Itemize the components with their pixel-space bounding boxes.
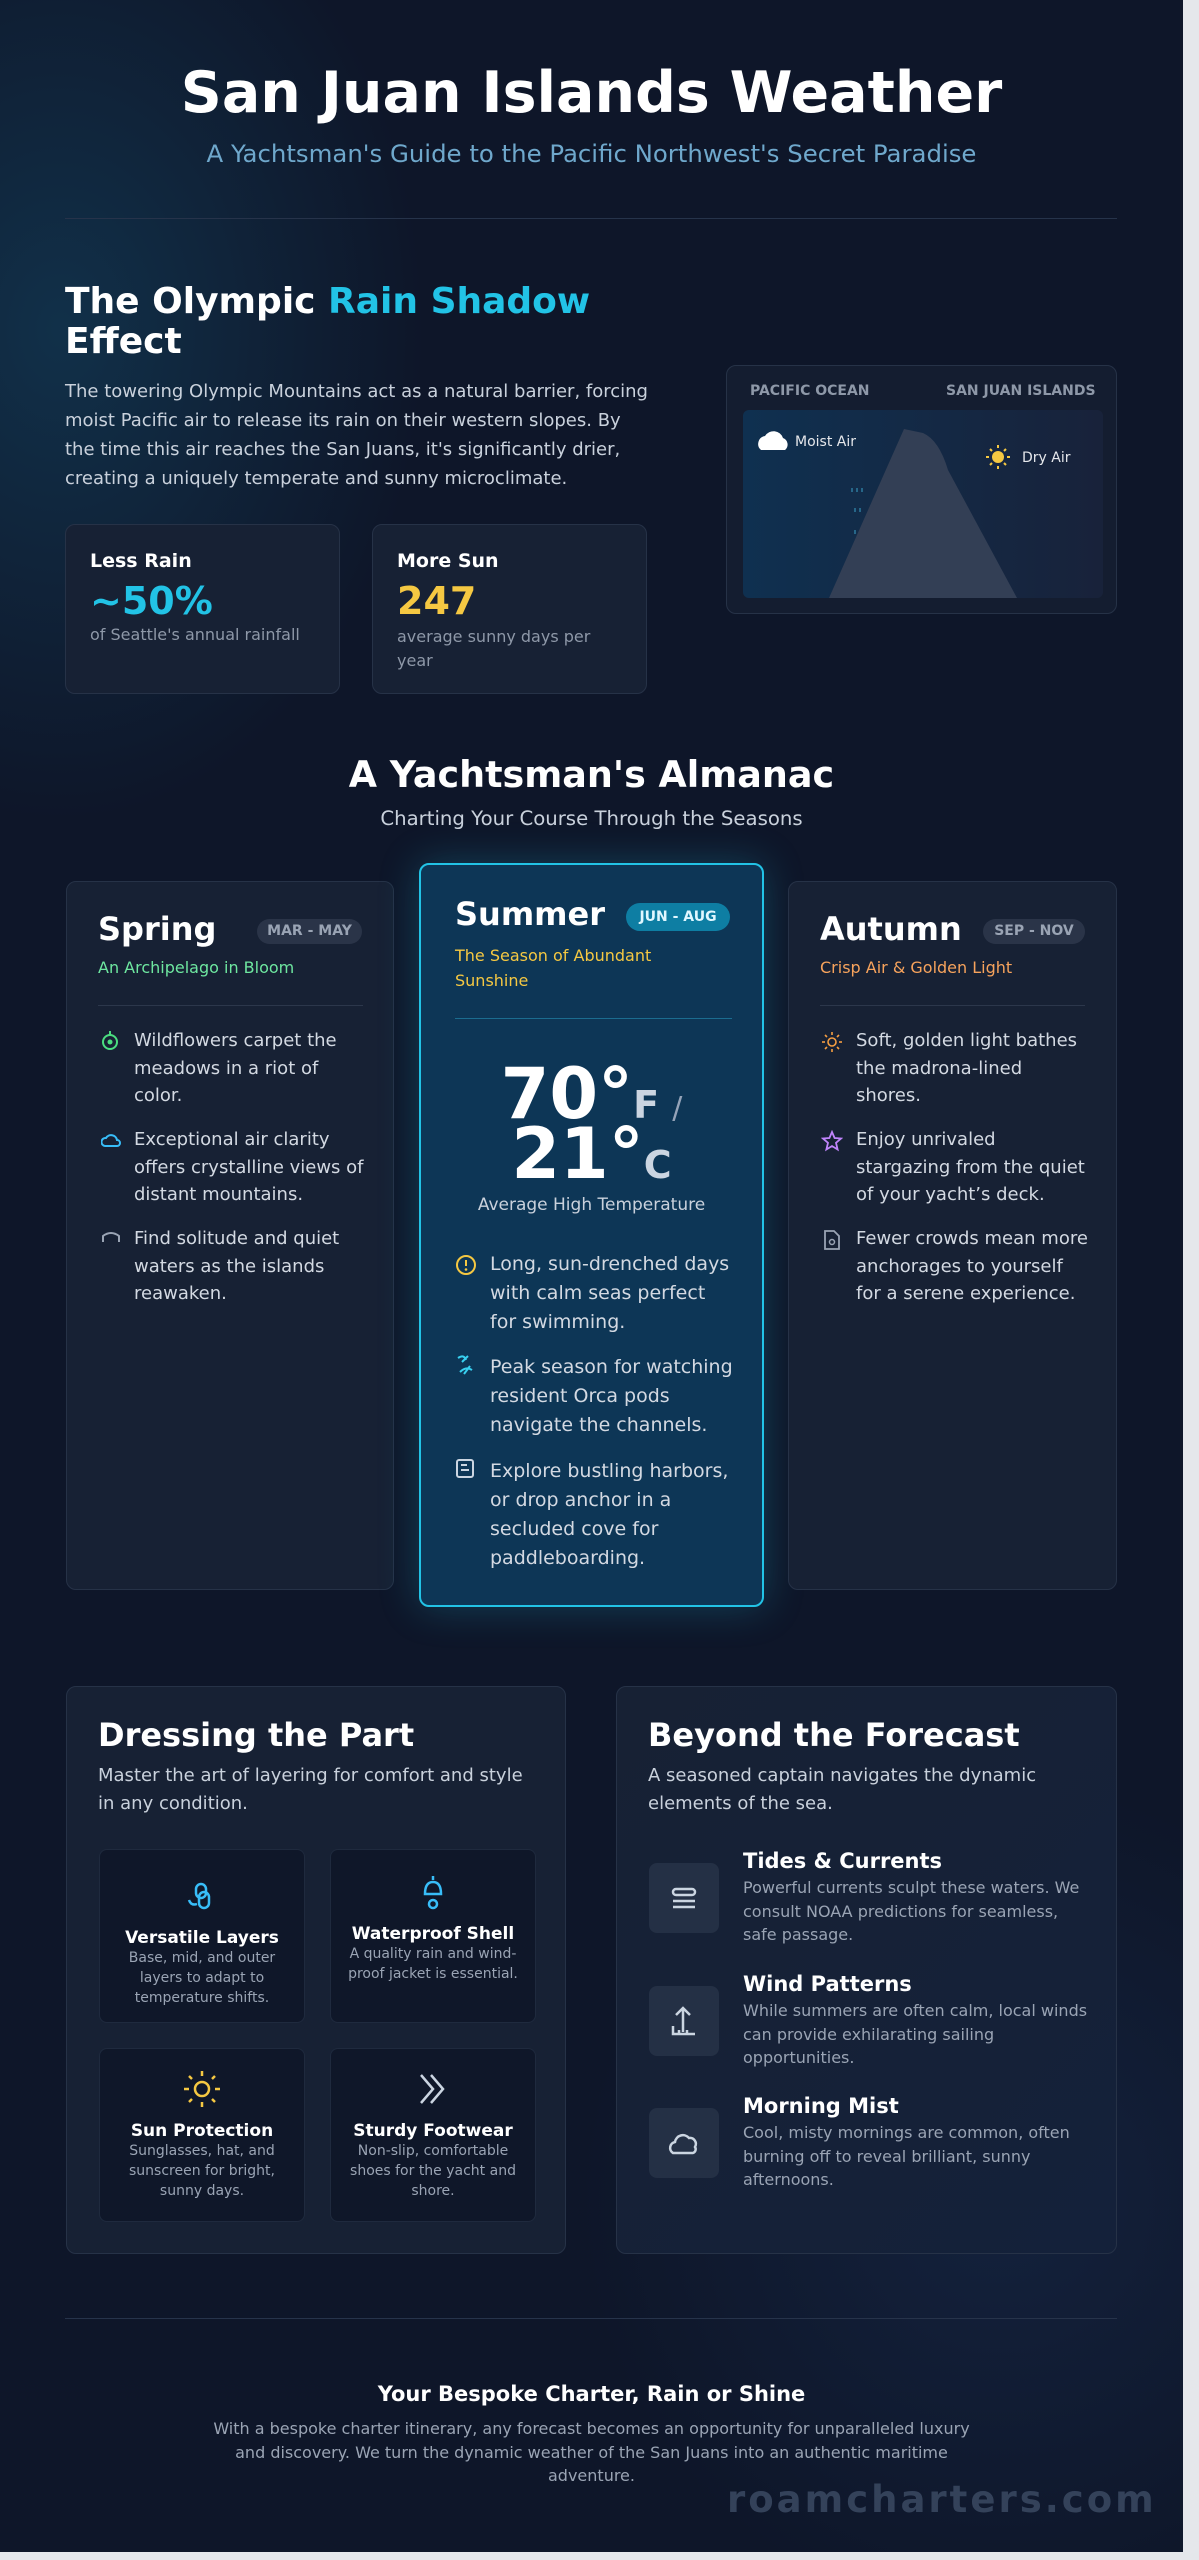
heading: rain shadow: Effect (65, 321, 182, 362)
stat card: less rain: of Seattle's annual rainfall (90, 625, 300, 644)
icon: shell (424, 1876, 442, 1910)
title: San Juan Islands Weather (181, 60, 1002, 126)
tile: sun protection: Sunglasses, hat, and sunscreen for bright, sunny days. (129, 2143, 275, 2199)
item: tides: Tides & Currents (743, 1849, 942, 1873)
panel: summer: Explore bustling harbors, or drop anchor in a secluded cove for paddleboarding. (490, 1460, 728, 1569)
footer heading: Your Bespoke Charter, Rain or Shine (378, 2382, 805, 2406)
temperature: 21°C (511, 1113, 672, 1195)
icon: layers (188, 1882, 210, 1910)
panel: summer: Average High Temperature (478, 1195, 705, 1215)
temperature (501, 1053, 682, 1195)
panel: spring: Find solitude and quiet waters as the islands reawaken. (134, 1228, 339, 1304)
item: wind: Wind Patterns (743, 1972, 912, 1996)
panel: beyond the forecast: A seasoned captain navigates the dynamic elements of the sea. (648, 1765, 1036, 1814)
subtitle: A Yachtsman's Guide to the Pacific Northwest's Secret Paradise (207, 139, 976, 168)
diagram: rain shadow: Moist Air (795, 434, 856, 450)
panel: spring: An Archipelago in Bloom (98, 958, 294, 977)
panel: summer: JUN - AUG (639, 909, 717, 925)
tile: versatile layers (99, 1849, 305, 2023)
icon: chevrons (420, 2074, 444, 2104)
panel: dressing the part: Dressing the Part (98, 1716, 414, 1754)
icon: cloud (758, 431, 788, 450)
panel: dressing the part (66, 1686, 566, 2254)
panel: summer (419, 863, 764, 1607)
panel: autumn: Autumn (820, 910, 962, 948)
item: wind (649, 1972, 1087, 2067)
icon: orca (458, 1355, 472, 1375)
icon: alert sun (456, 1255, 476, 1275)
diagram: rain shadow (726, 365, 1117, 614)
panel: autumn: of your yacht’s deck. (856, 1184, 1045, 1205)
panel: autumn: SEP - NOV (994, 923, 1074, 939)
heading: rain shadow: The Olympic Rain Shadow (65, 281, 590, 322)
stat card: less rain: ~50% (90, 579, 213, 623)
panel: autumn: Soft, golden light bathes the madrona-lined shores. (856, 1030, 1077, 1106)
tile: versatile layers: Base, mid, and outer layers to adapt to temperature shifts. (129, 1950, 275, 2006)
icon: sun (184, 2071, 220, 2107)
heading: almanac: A Yachtsman's Almanac (349, 753, 834, 796)
stat card: less rain (65, 524, 340, 694)
footer text: With a bespoke charter itinerary, any forecast becomes an opportunity for unparalleled luxury and discovery. We turn the dynamic weather of the San Juans into an authentic maritime adventure. (213, 2419, 970, 2485)
stat card: more sun: average sunny days per year (397, 627, 590, 670)
icon: cloud (101, 1134, 121, 1147)
icon: sun (992, 451, 1004, 463)
temperature: 70°F / (501, 1053, 682, 1135)
tile: sun protection (99, 2048, 305, 2222)
icon: cloud (649, 2108, 719, 2178)
icon: tides (649, 1863, 719, 1933)
icon: document (824, 1230, 840, 1250)
panel: spring: MAR - MAY (267, 923, 352, 939)
item: tides: Powerful currents sculpt these waters. We consult NOAA predictions for seamless, safe passage. (743, 1878, 1079, 1944)
panel: beyond the forecast: Beyond the Forecast (648, 1716, 1020, 1754)
diagram: rain shadow: Dry Air (1022, 450, 1071, 466)
panel: spring: Exceptional air clarity offers crystalline views of distant mountains. (134, 1129, 364, 1205)
panel: beyond the forecast (616, 1686, 1117, 2254)
stat card: more sun: More Sun (397, 550, 499, 572)
item: wind: While summers are often calm, local winds can provide exhilarating sailing opportunities. (743, 2001, 1087, 2067)
tile: sturdy footwear (330, 2048, 536, 2222)
tile: versatile layers: Versatile Layers (125, 1928, 279, 1948)
panel: summer: Summer (455, 895, 605, 933)
panel: autumn: Enjoy unrivaled (856, 1129, 996, 1150)
item: tides (649, 1849, 1079, 1944)
icon: sun (822, 1032, 842, 1052)
diagram: rain shadow: SAN JUAN ISLANDS (946, 383, 1096, 399)
stat card: more sun (372, 524, 647, 694)
mountain (829, 429, 1017, 598)
stat card: more sun: 247 (397, 579, 476, 623)
panel: autumn: Fewer crowds mean more anchorages to yourself for a serene experience. (856, 1228, 1088, 1304)
watermark: roamcharters.com (727, 2478, 1157, 2521)
panel: summer: The Season of Abundant Sunshine (455, 946, 651, 990)
icon: star (821, 1130, 843, 1152)
icon: harbor (456, 1459, 474, 1478)
panel: dressing the part: Master the art of layering for comfort and style in any condition. (98, 1765, 523, 1814)
panel: spring (66, 881, 394, 1590)
tile: waterproof shell (330, 1849, 536, 2023)
subtitle: almanac: Charting Your Course Through the Seasons (380, 807, 803, 830)
panel: autumn: Crisp Air & Golden Light (820, 958, 1012, 977)
icon: flower (102, 1031, 118, 1050)
panel: autumn: stargazing from the quiet (856, 1156, 1085, 1178)
tile: waterproof shell: Waterproof Shell (352, 1924, 514, 1944)
stat card: less rain: Less Rain (90, 550, 192, 572)
icon: wind (649, 1986, 719, 2056)
tile: sun protection: Sun Protection (131, 2121, 273, 2141)
item: mist: Cool, misty mornings are common, often burning off to reveal brilliant, sunny afternoons. (743, 2123, 1070, 2189)
tile: waterproof shell: A quality rain and wind-proof jacket is essential. (348, 1946, 518, 1982)
heading: rain shadow (65, 281, 590, 362)
panel: summer: Peak season for watching resident Orca pods navigate the channels. (490, 1356, 733, 1436)
icon: wave (102, 1232, 120, 1242)
panel: spring: Wildflowers carpet the meadows in a riot of color. (134, 1030, 337, 1106)
tile: sturdy footwear: Non-slip, comfortable shoes for the yacht and shore. (350, 2143, 516, 2199)
item: mist: Morning Mist (743, 2094, 899, 2118)
item: mist (649, 2094, 1070, 2189)
text block: rain shadow explanation: The towering Olympic Mountains act as a natural barrier, forcing moist Pacific air to release its rain on their western slopes. By the time this air reaches the San Juans, it's significantly drier, creating a uniquely temperate and sunny microclimate. (65, 381, 648, 489)
diagram: rain shadow: PACIFIC OCEAN (750, 383, 870, 399)
panel: summer: Long, sun-drenched days with calm seas perfect for swimming. (490, 1253, 729, 1333)
panel: spring: Spring (98, 910, 216, 948)
tile: sturdy footwear: Sturdy Footwear (353, 2121, 513, 2141)
panel: autumn (788, 881, 1117, 1590)
